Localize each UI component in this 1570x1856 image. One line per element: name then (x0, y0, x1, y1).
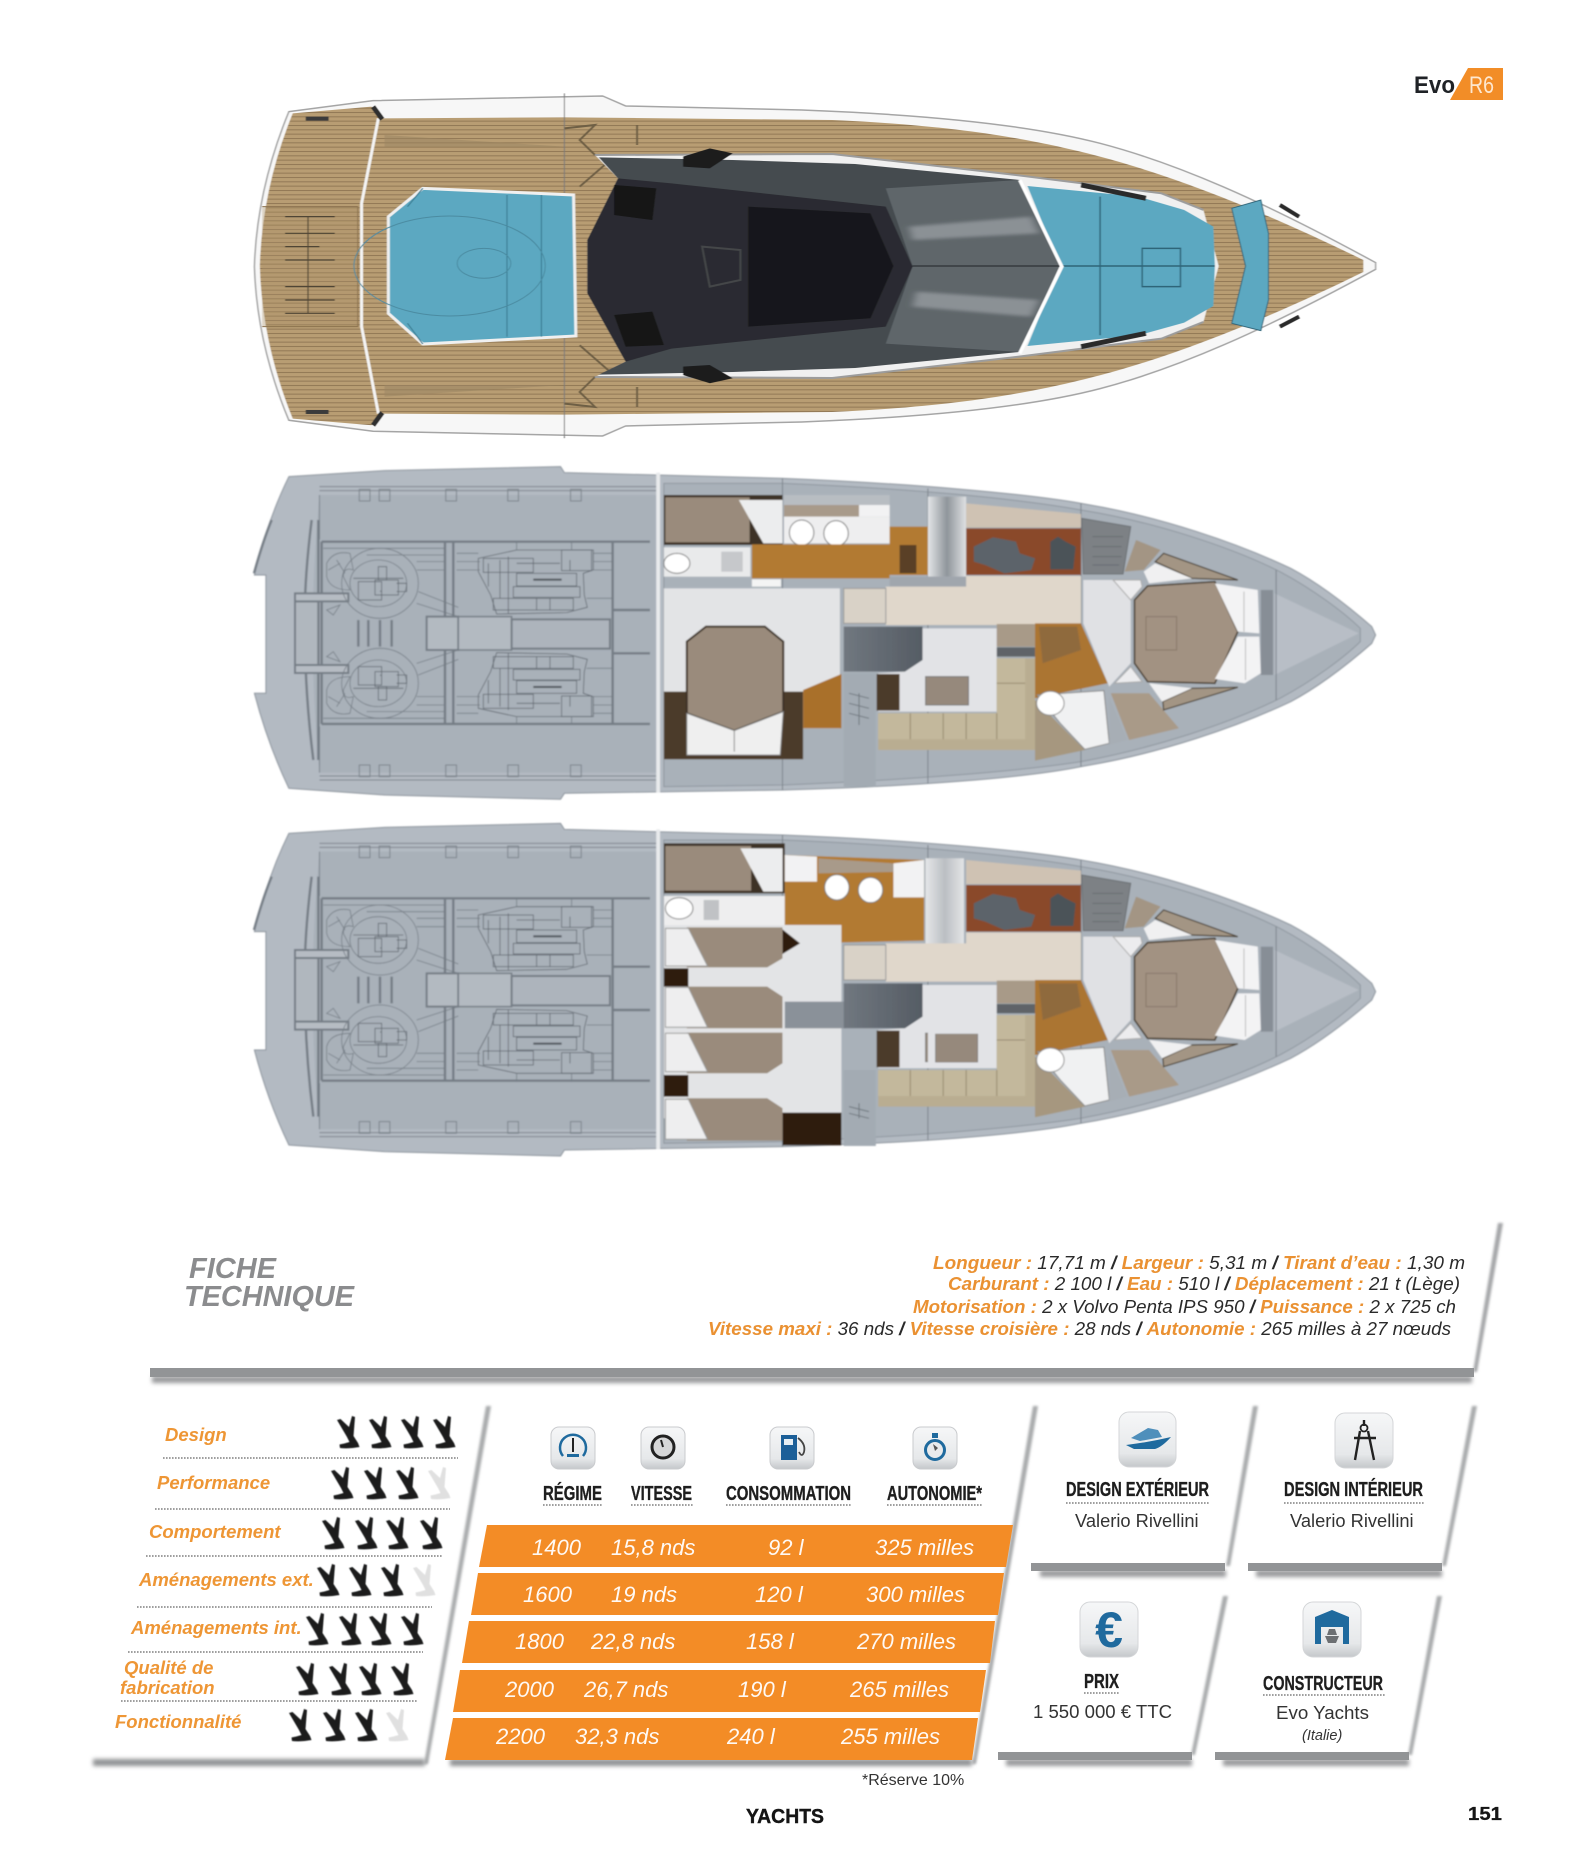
icon: compass (1335, 1413, 1393, 1468)
panel: design intérieur (1248, 1406, 1477, 1577)
table row 2000: 26,7 nds (583, 1677, 668, 1702)
table row 1400: 325 milles (875, 1535, 974, 1560)
table row 2200: 32,3 nds (575, 1724, 659, 1749)
rating: Comportement: Comportement (149, 1521, 281, 1542)
icon: speedometer (641, 1427, 685, 1469)
logo orange tag (1450, 68, 1503, 100)
icon: yacht (1119, 1412, 1176, 1467)
table bottom shadow (450, 1759, 972, 1766)
table row 1800: 158 l (746, 1629, 795, 1654)
specifications: Vitesse maxi : 36 nds / Vitesse croisière : 28 nds / Autonomie : 265 milles à 27 nœuds (708, 1318, 1451, 1339)
panel: constructeur: CONSTRUCTEUR (1263, 1673, 1383, 1695)
panel: performance table (445, 1406, 1038, 1789)
column headings: VITESSE (631, 1483, 692, 1505)
panel: prix (998, 1596, 1228, 1766)
panel bottom shadow (152, 1376, 1472, 1383)
table row 1800: 270 milles (856, 1629, 956, 1654)
footnote: *Réserve 10% (862, 1772, 964, 1789)
aft cabin and bathrooms (664, 495, 966, 787)
rating: Aménagements int. (128, 1613, 424, 1652)
icon: euro: € (1095, 1602, 1123, 1658)
teak deck (260, 107, 1363, 425)
panel: ratings (93, 1406, 491, 1766)
table row 1400: 15,8 nds (611, 1535, 695, 1560)
engine room (254, 520, 650, 760)
specifications: Motorisation : 2 x Volvo Penta IPS 950 / Puissance : 2 x 725 ch (913, 1296, 1456, 1317)
table row 1400: 92 l (768, 1535, 805, 1560)
table row 2000: 2000 (504, 1677, 555, 1702)
table row 1600: 19 nds (611, 1582, 677, 1607)
rating: Performance (155, 1467, 450, 1509)
rating: Aménagements int.: Aménagements int. (130, 1617, 302, 1638)
deck plan: lower deck, version 1 (254, 467, 1376, 799)
table row 1600 (471, 1573, 1004, 1615)
panel: design extérieur (1031, 1406, 1258, 1577)
foredeck cushions (1027, 186, 1215, 346)
hardtop (587, 178, 913, 362)
panel edge (424, 1406, 491, 1764)
table row 1400: 1400 (532, 1535, 582, 1560)
rating: Qualité de fabrication: Qualité de (124, 1657, 213, 1678)
footer section name: YACHTS (746, 1806, 824, 1828)
rating: Design: Design (165, 1424, 227, 1445)
heading: FICHE (189, 1253, 278, 1285)
table row 2000: 265 milles (849, 1677, 949, 1702)
rating: Fonctionnalité (115, 1709, 408, 1741)
column headings: CONSOMMATION (726, 1483, 851, 1505)
panel: prix: 1 550 000 € TTC (1033, 1701, 1172, 1722)
hull outline (254, 96, 1376, 436)
icon: shipyard (1303, 1602, 1361, 1657)
panel: design intérieur: Valerio Rivellini (1290, 1510, 1414, 1531)
table row 2000 (453, 1670, 986, 1712)
saloon table (928, 1032, 981, 1063)
icon: euro (1080, 1602, 1138, 1658)
rating: Qualité de fabrication: fabrication (120, 1677, 215, 1698)
table row 2200 (445, 1718, 978, 1760)
table row 2200: 2200 (495, 1724, 546, 1749)
table row 2200: 255 milles (840, 1724, 940, 1749)
heading (184, 1253, 356, 1313)
table row 1800 (462, 1621, 995, 1663)
engine room (254, 877, 650, 1117)
twin cabins and bathrooms (664, 843, 964, 1146)
specifications: Longueur : 17,71 m / Largeur : 5,31 m / Tirant d’eau : 1,30 m (933, 1252, 1465, 1273)
panel edge (972, 1406, 1038, 1764)
deck plan: lower deck, version 2 (254, 823, 1376, 1156)
table row 1800: 22,8 nds (590, 1629, 675, 1654)
logo: Evo R6: R6 (1469, 72, 1494, 99)
rating: Fonctionnalité: Fonctionnalité (115, 1711, 241, 1732)
panel: constructeur (1215, 1596, 1442, 1766)
table row 2000: 190 l (738, 1677, 787, 1702)
specifications: Carburant : 2 100 l / Eau : 510 l / Déplacement : 21 t (Lège) (948, 1273, 1460, 1294)
bow hatch (1232, 200, 1268, 331)
panel: design intérieur: DESIGN INTÉRIEUR (1284, 1478, 1423, 1501)
cockpit surround (587, 154, 1219, 378)
rating: Qualité de fabrication (120, 1657, 417, 1701)
panel right edge (1473, 1223, 1503, 1372)
table row 1600: 300 milles (866, 1582, 965, 1607)
table row 1800: 1800 (515, 1629, 565, 1654)
heading: TECHNIQUE (184, 1281, 356, 1313)
table row 2200: 240 l (726, 1724, 776, 1749)
column headings: RÉGIME (543, 1482, 602, 1505)
specifications (708, 1252, 1465, 1339)
column headings (543, 1482, 983, 1505)
panel: design extérieur: DESIGN EXTÉRIEUR (1066, 1478, 1209, 1501)
page number: 151 (1468, 1804, 1502, 1824)
rating: Aménagements ext. (137, 1564, 436, 1607)
sun pad (388, 188, 576, 344)
panel: prix: PRIX (1084, 1671, 1119, 1693)
rating: Performance: Performance (157, 1472, 270, 1493)
rating: Comportement (146, 1517, 442, 1556)
icon: stopwatch (913, 1427, 957, 1469)
logo: Evo R6: Evo (1414, 72, 1455, 99)
icon: rpm gauge (551, 1427, 595, 1469)
panel bottom bar (150, 1368, 1474, 1377)
column headings: AUTONOMIE* (887, 1483, 982, 1505)
rating: Design (163, 1416, 458, 1458)
deck plan: top view (254, 93, 1376, 438)
panel: constructeur: (Italie) (1302, 1728, 1342, 1744)
rating: Aménagements ext.: Aménagements ext. (138, 1569, 314, 1590)
logo: Evo R6 (1414, 68, 1503, 100)
panel bottom shadow (93, 1759, 425, 1766)
panel: fiche technique (150, 1223, 1503, 1383)
table row 1400 (479, 1525, 1013, 1567)
table row 1600: 120 l (755, 1582, 804, 1607)
windscreen (587, 157, 1060, 375)
table row 1600: 1600 (523, 1582, 573, 1607)
panel: constructeur: Evo Yachts (1276, 1702, 1369, 1723)
icon: fuel pump (770, 1427, 814, 1469)
panel: design extérieur: Valerio Rivellini (1075, 1510, 1199, 1531)
